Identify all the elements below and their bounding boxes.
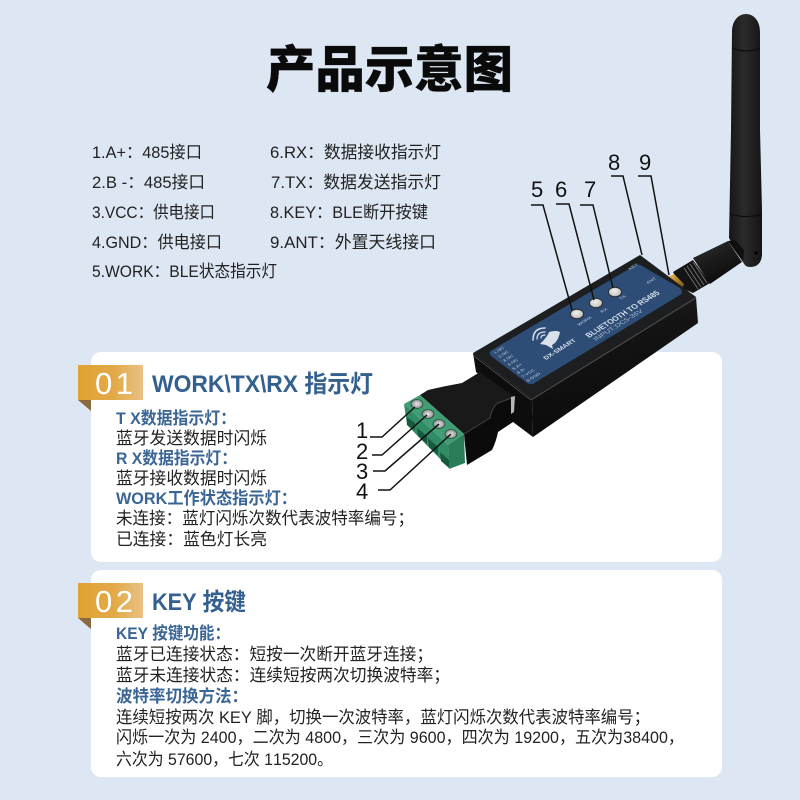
callout numbers 1-4: 3 bbox=[356, 459, 368, 484]
label: LED captions bbox=[576, 263, 657, 327]
callout numbers 1-4 bbox=[356, 407, 451, 504]
title: 产品示意图 bbox=[266, 42, 513, 98]
badge 02: 02 bbox=[95, 584, 133, 619]
label: input voltage: INPUT:DC5-36V bbox=[591, 307, 645, 342]
panel 01 background bbox=[91, 352, 722, 562]
panel 01 text: R X数据指示灯： bbox=[116, 449, 237, 468]
label: LED captions: RX bbox=[599, 307, 609, 314]
panel 02 text: 六次为 57600，七次 115200。 bbox=[116, 750, 333, 769]
label: LED captions: KEY bbox=[627, 263, 639, 271]
label: pin list: 6.B- bbox=[516, 367, 527, 375]
label: brand: DX-SMART bbox=[541, 337, 578, 361]
panel 01 text: T X数据指示灯： bbox=[116, 409, 236, 428]
panel: 02 key button bbox=[78, 570, 722, 777]
panel 01 text bbox=[116, 409, 414, 549]
label: pin list: 5.A+ bbox=[511, 362, 524, 371]
heading 02: KEY 按键 bbox=[152, 589, 246, 616]
panel 01 text: 蓝牙发送数据时闪烁 bbox=[116, 429, 267, 448]
label: pin list: 4.NC bbox=[506, 357, 520, 367]
callout numbers 5-9: 6 bbox=[555, 177, 567, 202]
LED indicators bbox=[570, 287, 622, 319]
callout numbers 1-4: 4 bbox=[356, 479, 368, 504]
panel 02 text: 连续短按两次 KEY 脚，切换一次波特率，蓝灯闪烁次数代表波特率编号； bbox=[116, 708, 650, 727]
label: pin list: 7.VCC bbox=[520, 368, 537, 379]
panel 02 text bbox=[116, 623, 684, 769]
label: pin list: 3.NC bbox=[502, 353, 515, 363]
panel 02 text: 波特率切换方法： bbox=[116, 686, 248, 706]
callout numbers 5-9: 7 bbox=[584, 177, 596, 202]
callout numbers 5-9: 5 bbox=[531, 177, 543, 202]
panel 02 background bbox=[91, 570, 722, 777]
screws bbox=[411, 400, 457, 438]
parts list bbox=[92, 143, 441, 281]
panel 01 text: WORK工作状态指示灯： bbox=[116, 488, 297, 508]
panel: 01 indicator lights bbox=[78, 352, 722, 562]
parts list: 4.GND：供电接口 bbox=[92, 233, 222, 252]
label: LED captions: TX bbox=[618, 294, 627, 301]
panel 02 text: KEY 按键功能： bbox=[116, 623, 230, 643]
panel 01 text: 已连接：蓝色灯长亮 bbox=[116, 530, 267, 549]
parts list: 3.VCC：供电接口 bbox=[92, 203, 215, 222]
badge 01 bbox=[78, 365, 143, 411]
panel 02 text: 蓝牙已连接状态：短按一次断开蓝牙连接； bbox=[116, 645, 433, 664]
panel 02 text: 闪烁一次为 2400，二次为 4800，三次为 9600，四次为 19200，五次为38400， bbox=[116, 728, 684, 747]
callout numbers 1-4: 1 bbox=[356, 418, 368, 443]
parts list: 2.B -：485接口 bbox=[92, 173, 205, 192]
panel 02 text: 蓝牙未连接状态：连续短按两次切换波特率； bbox=[116, 666, 450, 685]
heading 01: WORK\TX\RX 指示灯 bbox=[152, 371, 373, 398]
antenna whip bbox=[729, 14, 762, 267]
device illustration bbox=[404, 14, 762, 469]
plug housing bbox=[420, 372, 515, 465]
parts list: 7.TX：数据发送指示灯 bbox=[271, 173, 441, 192]
callout numbers 1-4: 2 bbox=[356, 439, 368, 464]
label: pin list bbox=[492, 345, 542, 383]
callout numbers 5-9 bbox=[531, 150, 669, 310]
parts list: 9.ANT：外置天线接口 bbox=[270, 233, 436, 252]
device label plate bbox=[490, 263, 682, 384]
panel 01 text: 蓝牙接收数据时闪烁 bbox=[116, 469, 267, 488]
label: pin list: 8.GND bbox=[525, 371, 542, 383]
label: pin list: 2.NC bbox=[497, 349, 511, 359]
parts list: 6.RX：数据接收指示灯 bbox=[270, 143, 441, 162]
green terminal block bbox=[404, 395, 465, 469]
callout numbers 5-9: 9 bbox=[639, 150, 651, 175]
parts list: 1.A+：485接口 bbox=[92, 143, 202, 162]
antenna connector bbox=[668, 240, 744, 293]
parts list: 8.KEY：BLE断开按键 bbox=[270, 203, 428, 222]
label: eagle logo bbox=[533, 328, 560, 349]
label: LED captions: WORK bbox=[576, 316, 593, 327]
device body bbox=[473, 255, 698, 437]
label: pin list: 1.NC bbox=[492, 345, 506, 355]
badge 02 bbox=[78, 583, 143, 629]
callout numbers 5-9: 8 bbox=[608, 150, 620, 175]
label: LED captions: ANT bbox=[645, 276, 657, 285]
badge 01: 01 bbox=[95, 366, 133, 401]
label: product name: BLUETOOTH TO RS485 bbox=[583, 289, 662, 340]
parts list: 5.WORK：BLE状态指示灯 bbox=[92, 262, 277, 281]
panel 01 text: 未连接：蓝灯闪烁次数代表波特率编号； bbox=[116, 509, 414, 528]
